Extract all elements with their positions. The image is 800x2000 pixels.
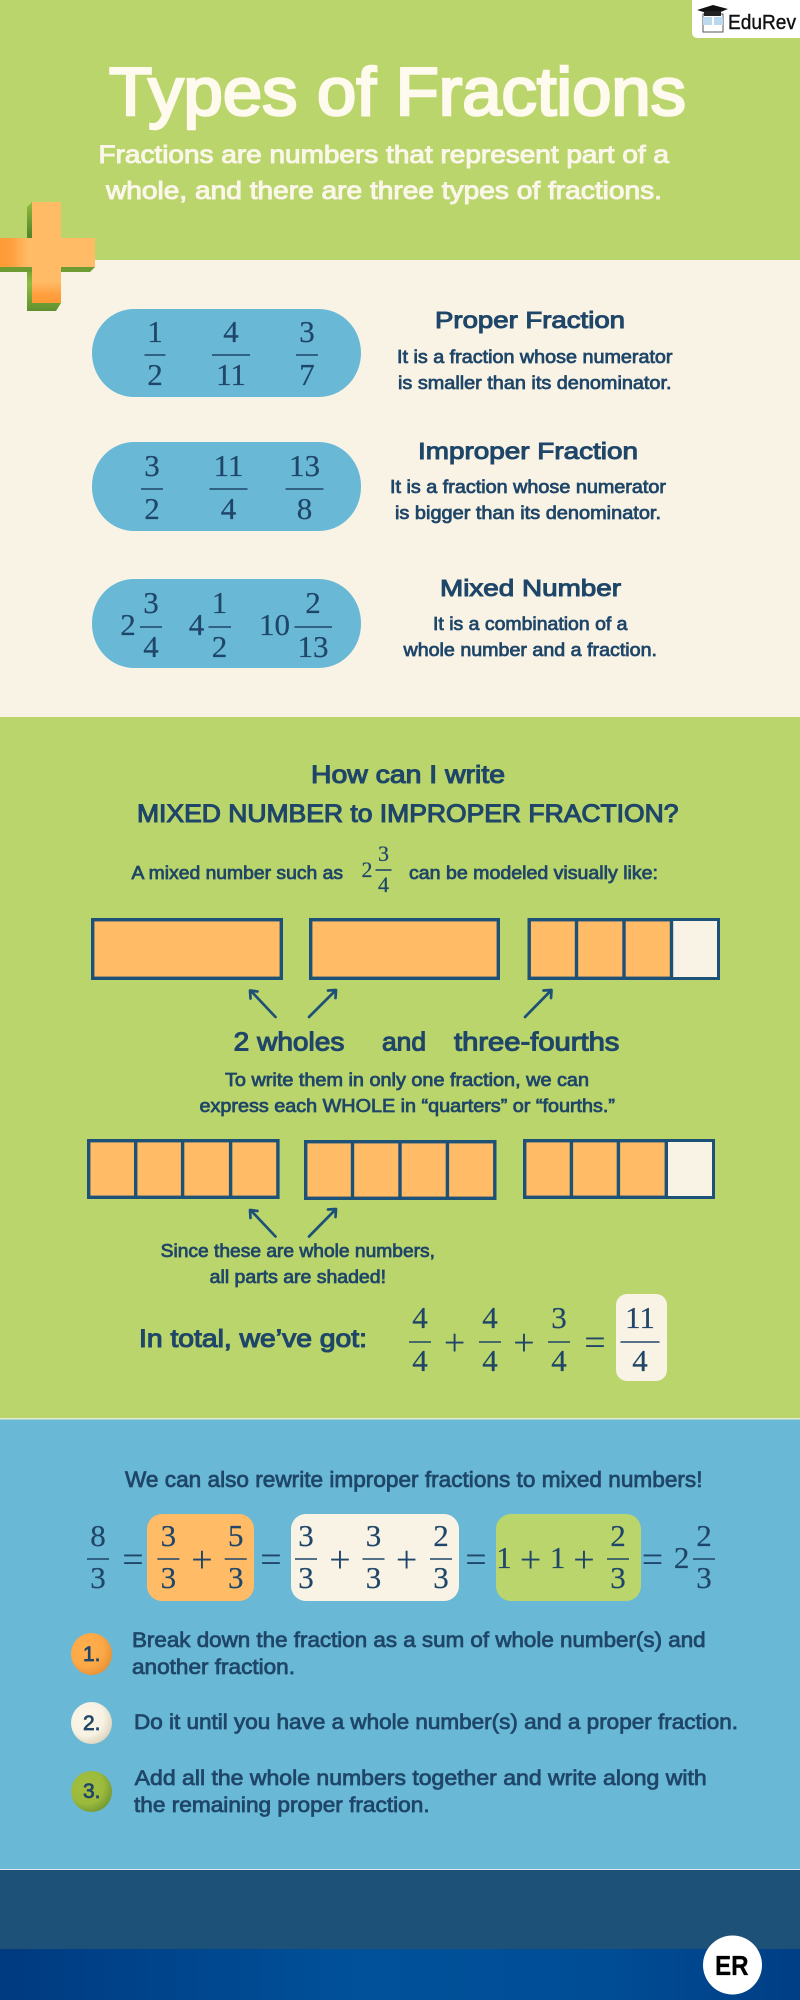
equation: total: 4 bbox=[632, 1343, 648, 1378]
step 1: another fraction. bbox=[132, 1656, 295, 1679]
text: proper fraction: It is a fraction whose numerator bbox=[397, 347, 672, 367]
pill: improper fractions: 2 bbox=[144, 491, 160, 526]
panel: mixed number to improper fraction bbox=[0, 717, 800, 1418]
pill: improper fractions: 13 bbox=[289, 448, 320, 483]
text: mixed number: It is a combination of a bbox=[433, 614, 629, 634]
equation: total: 4 bbox=[482, 1343, 498, 1378]
pill: improper fractions: 3 bbox=[144, 448, 160, 483]
equation: rewrite: 3 bbox=[610, 1560, 626, 1595]
step 1: 1. bbox=[83, 1643, 100, 1666]
arrow bbox=[250, 990, 276, 1017]
pill: mixed numbers: 4 bbox=[189, 607, 205, 642]
step 3 bbox=[71, 1767, 707, 1817]
equation: rewrite: 3 bbox=[433, 1560, 449, 1595]
text: mixed number bbox=[402, 575, 657, 660]
pill: proper fractions: 11 bbox=[216, 357, 246, 392]
logo: EduRev bbox=[692, 0, 800, 38]
heading: MIXED NUMBER to IMPROPER FRACTION? bbox=[137, 800, 678, 828]
text: whole numbers shaded bbox=[161, 1241, 435, 1287]
text: whole numbers shaded: Since these are whole numbers, bbox=[161, 1241, 435, 1261]
panel: footer bbox=[0, 1869, 800, 2000]
pill: mixed numbers: 2 bbox=[212, 629, 227, 664]
equation: rewrite: + bbox=[191, 1539, 213, 1581]
equation: rewrite: + bbox=[520, 1539, 541, 1581]
equation: rewrite: 2 bbox=[696, 1518, 712, 1553]
equation: rewrite: + bbox=[396, 1539, 417, 1581]
equation: total: + bbox=[444, 1322, 465, 1364]
pill: mixed numbers: 2 bbox=[120, 607, 136, 642]
arrow bbox=[250, 1210, 276, 1236]
text: improper fraction: is bigger than its denominator. bbox=[395, 503, 661, 523]
text: modeled visually bbox=[132, 841, 658, 897]
pill: mixed numbers: 2 bbox=[305, 585, 321, 620]
equation: total: 11 bbox=[625, 1300, 655, 1335]
highlight box: cream bbox=[291, 1514, 459, 1601]
equation: rewrite: = bbox=[122, 1539, 144, 1581]
bar model: three-fourths bbox=[529, 919, 718, 979]
text: improper fraction bbox=[390, 438, 666, 523]
subtitle: whole, and there are three types of fractions. bbox=[105, 177, 662, 205]
heading: We can also rewrite improper fractions to mixed numbers! bbox=[125, 1467, 702, 1492]
step 2: Do it until you have a whole number(s) and a proper fraction. bbox=[134, 1711, 738, 1734]
equation: rewrite: = bbox=[465, 1539, 487, 1581]
equation: rewrite: + bbox=[329, 1539, 351, 1581]
pill: mixed numbers: 10 bbox=[259, 607, 290, 642]
text: whole numbers shaded: all parts are shaded! bbox=[210, 1267, 386, 1287]
equation: rewrite bbox=[87, 1518, 715, 1595]
bar model: whole 2 bbox=[311, 920, 498, 978]
pill: proper fractions: 3 bbox=[299, 314, 315, 349]
highlight box: orange bbox=[147, 1514, 254, 1601]
pill: improper fractions: 11 bbox=[214, 448, 243, 483]
bar model: three-fourths bbox=[525, 1140, 713, 1198]
arrow bbox=[309, 1209, 336, 1236]
subtitle: Fractions are numbers that represent part of a bbox=[98, 141, 669, 169]
panel: header bbox=[0, 0, 800, 260]
equation: rewrite: 2 bbox=[610, 1518, 626, 1553]
text: modeled visually: 3 bbox=[378, 841, 389, 866]
pill: mixed numbers: 13 bbox=[298, 629, 328, 664]
equation: rewrite: + bbox=[573, 1539, 595, 1581]
text: modeled visually: 4 bbox=[378, 872, 389, 897]
step 3: the remaining proper fraction. bbox=[134, 1794, 430, 1817]
labels: wholes and three-fourths: three-fourths bbox=[454, 1026, 619, 1056]
equation: rewrite: 3 bbox=[298, 1518, 314, 1553]
text: improper fraction: It is a fraction whose numerator bbox=[390, 477, 666, 497]
equation: rewrite: = bbox=[642, 1539, 663, 1581]
text: modeled visually: 2 bbox=[362, 857, 372, 882]
text: mixed number: whole number and a fraction. bbox=[402, 640, 657, 660]
pill: proper fractions bbox=[92, 309, 361, 397]
equation: total: 4 bbox=[482, 1300, 498, 1335]
equation: rewrite: 3 bbox=[161, 1560, 176, 1595]
pill: proper fractions: 2 bbox=[147, 357, 163, 392]
equation: rewrite: 2 bbox=[433, 1518, 449, 1553]
text: proper fraction: Proper Fraction bbox=[435, 307, 625, 333]
equation: rewrite: 3 bbox=[298, 1560, 314, 1595]
step 1 bbox=[71, 1629, 706, 1679]
title: Types of Fractions bbox=[109, 54, 686, 130]
bar model: four-fourths 2 bbox=[306, 1141, 495, 1199]
text: modeled visually: can be modeled visually like: bbox=[409, 863, 658, 883]
text: in total: In total, we’ve got: bbox=[139, 1325, 367, 1353]
pill: proper fractions: 1 bbox=[147, 314, 163, 349]
equation: rewrite: 5 bbox=[228, 1518, 243, 1553]
subtitle bbox=[98, 141, 669, 205]
pill: mixed numbers: 3 bbox=[143, 585, 159, 620]
answer box bbox=[616, 1294, 667, 1381]
text: express each whole bbox=[200, 1070, 615, 1116]
text: improper fraction: Improper Fraction bbox=[418, 438, 638, 464]
equation: rewrite: 3 bbox=[228, 1560, 243, 1595]
badge: ER: ER bbox=[715, 1950, 748, 1981]
pill: improper fractions bbox=[92, 442, 361, 531]
text: express each whole: express each WHOLE in “quarters” or “fourths.” bbox=[200, 1096, 615, 1116]
bar model: four-fourths 1 bbox=[89, 1140, 278, 1198]
equation: rewrite: 3 bbox=[161, 1518, 176, 1553]
labels: wholes and three-fourths: and bbox=[382, 1026, 426, 1056]
step 1: Break down the fraction as a sum of whole number(s) and bbox=[132, 1629, 706, 1652]
text: express each whole: To write them in only one fraction, we can bbox=[225, 1070, 589, 1090]
highlight box: green bbox=[496, 1514, 641, 1601]
arrow bbox=[525, 990, 552, 1017]
equation: rewrite: 3 bbox=[366, 1560, 381, 1595]
equation: rewrite: 3 bbox=[90, 1560, 106, 1595]
text: proper fraction: is smaller than its denominator. bbox=[398, 373, 672, 393]
badge: ER bbox=[703, 1936, 762, 1994]
equation: total: 4 bbox=[412, 1343, 428, 1378]
heading: How can I write bbox=[311, 761, 505, 789]
equation: rewrite: 1 bbox=[496, 1540, 512, 1575]
bar model: whole 1 bbox=[93, 920, 281, 978]
text: proper fraction bbox=[397, 307, 672, 393]
panel: three types of fractions bbox=[0, 260, 800, 717]
equation: rewrite: 3 bbox=[366, 1518, 381, 1553]
step 2: 2. bbox=[83, 1712, 100, 1735]
equation: total: 4 bbox=[412, 1300, 428, 1335]
pill: mixed numbers bbox=[92, 579, 361, 668]
pill: mixed numbers: 1 bbox=[212, 585, 227, 620]
pill: proper fractions: 7 bbox=[299, 357, 315, 392]
pill: improper fractions: 4 bbox=[221, 491, 237, 526]
icon: 3D plus sign bbox=[0, 202, 95, 311]
step 3: 3. bbox=[83, 1780, 100, 1803]
equation: rewrite: 3 bbox=[696, 1560, 712, 1595]
labels: wholes and three-fourths bbox=[234, 1026, 619, 1056]
pill: improper fractions: 8 bbox=[297, 491, 312, 526]
equation: total: 4 bbox=[551, 1343, 567, 1378]
step 3: Add all the whole numbers together and write along with bbox=[135, 1767, 707, 1790]
panel: improper fractions to mixed numbers bbox=[0, 1418, 800, 1870]
step 2 bbox=[71, 1702, 738, 1744]
equation: rewrite: = bbox=[260, 1539, 282, 1581]
equation: rewrite: 8 bbox=[90, 1518, 106, 1553]
equation: rewrite: 1 bbox=[550, 1540, 565, 1575]
equation: total: + bbox=[513, 1322, 535, 1364]
equation: total: 3 bbox=[551, 1300, 567, 1335]
arrow bbox=[309, 990, 336, 1017]
heading bbox=[137, 761, 678, 828]
pill: proper fractions: 4 bbox=[223, 314, 239, 349]
equation: total: = bbox=[584, 1322, 606, 1364]
equation: total bbox=[409, 1300, 660, 1378]
logo: EduRev: EduRev bbox=[728, 11, 797, 34]
equation: rewrite: 2 bbox=[674, 1540, 689, 1575]
labels: wholes and three-fourths: 2 wholes bbox=[234, 1026, 344, 1056]
text: modeled visually: A mixed number such as bbox=[132, 863, 343, 883]
text: mixed number: Mixed Number bbox=[440, 575, 621, 601]
pill: mixed numbers: 4 bbox=[143, 629, 159, 664]
